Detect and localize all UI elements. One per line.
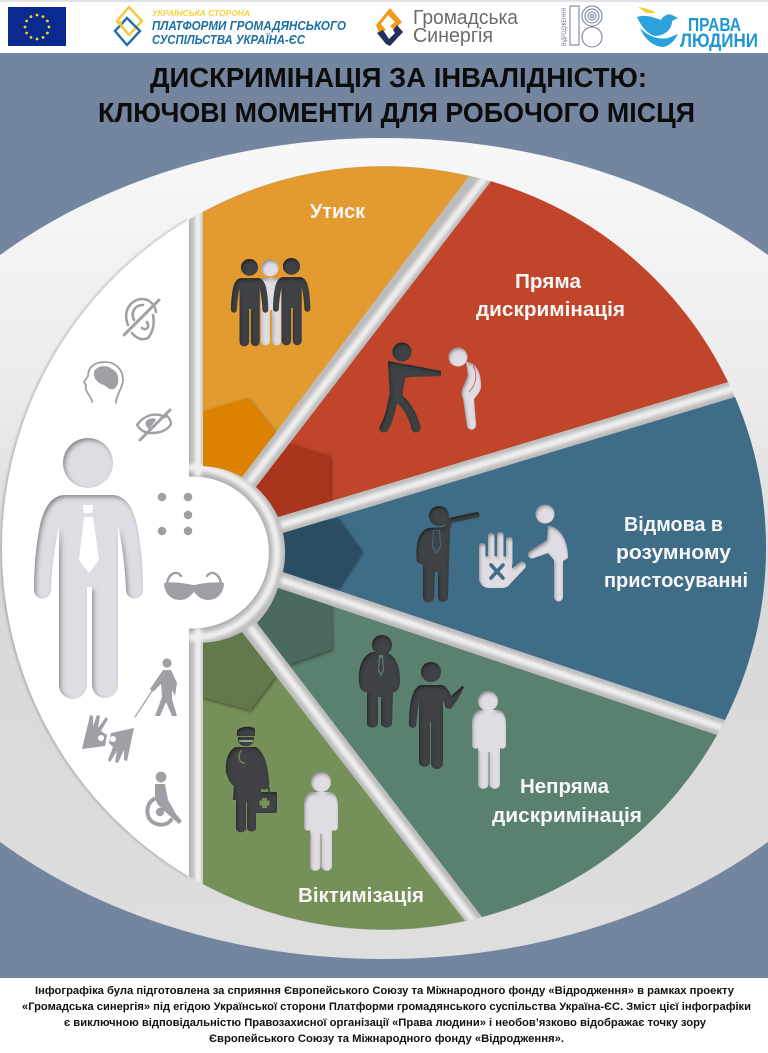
icon: crossed eye bbox=[137, 410, 171, 440]
footer disclaimer text: Інфографіка була підготовлена за сприяння Європейського Союзу та Міжнародного фонду «Відродження» в рамках проекту bbox=[35, 985, 735, 997]
figures: doctor and patient bbox=[226, 727, 338, 871]
figures: pointing man and bent person bbox=[384, 342, 481, 430]
logo: civil society platform: ПЛАТФОРМИ ГРОМАДЯНСЬКОГО bbox=[152, 18, 346, 33]
label: Відмова в розумному пристосуванні: пристосуванні bbox=[604, 570, 748, 592]
title: ДИСКРИМІНАЦІЯ ЗА ІНВАЛІДНІСТЮ: bbox=[150, 62, 647, 93]
light grey ellipse backdrop bbox=[0, 138, 768, 959]
label: Відмова в розумному пристосуванні: розумному bbox=[616, 542, 732, 564]
header logo strip bbox=[0, 0, 768, 53]
icon: head with brain bbox=[84, 362, 123, 403]
hexagon: teal dark bbox=[257, 588, 335, 666]
icon: dark glasses bbox=[164, 573, 224, 600]
figures: refusing man, stop hand, person bbox=[416, 504, 568, 602]
label: Пряма дискримінація: дискримінація bbox=[476, 299, 625, 321]
footer disclaimer text: Європейського Союзу та Міжнародного фонду «Відродження». bbox=[209, 1033, 564, 1045]
slice: orange bbox=[203, 166, 469, 477]
logo: Vidrodzhennia foundation: ВІДРОДЖЕННЯ bbox=[562, 8, 568, 46]
hexagon: green dark bbox=[203, 632, 277, 713]
label: Утиск: Утиск bbox=[310, 201, 366, 223]
logo: Hromadska Synerhiia bbox=[376, 7, 519, 47]
footer disclaimer text: «Громадська синергія» під егідою Української сторони Платформи громадянського суспільства Україна-ЄС. Зміст цієї інфографіки bbox=[22, 1001, 751, 1013]
icon: wheelchair user bbox=[147, 772, 182, 825]
logo: EU flag bbox=[8, 7, 66, 46]
slice: blue bbox=[270, 390, 768, 730]
figures: three people, indirect discrimination bbox=[359, 635, 506, 789]
footer disclaimer text bbox=[22, 985, 751, 1045]
icon: braille dots bbox=[158, 493, 192, 535]
footer disclaimer text: є виключною відповідальністю Правозахисної організації «Права людини» і необов’язково відображає точку зору bbox=[64, 1017, 707, 1029]
slice: teal bbox=[250, 580, 730, 925]
main white-panel person figure bbox=[34, 438, 143, 699]
label: Віктимізація: Віктимізація bbox=[298, 885, 424, 907]
hexagon: orange dark bbox=[203, 398, 276, 477]
icon: crossed ear bbox=[124, 299, 159, 339]
logo: Hromadska Synerhiia: Громадська bbox=[413, 7, 519, 29]
white left half with hub bbox=[2, 220, 269, 876]
logo: Human Rights organisation: ПРАВА bbox=[688, 15, 741, 35]
figures: three people, harassment bbox=[231, 258, 310, 346]
logo: Vidrodzhennia foundation bbox=[562, 6, 602, 47]
title bbox=[98, 62, 695, 128]
slice: green bbox=[195, 625, 475, 930]
label: Непряма дискримінація: Непряма bbox=[520, 776, 610, 798]
logo: civil society platform: УКРАЇНСЬКА СТОРОНА bbox=[152, 9, 250, 18]
logo: Human Rights organisation: ЛЮДИНИ bbox=[680, 31, 758, 52]
icon: blind person with cane bbox=[135, 658, 177, 717]
hexagon: blue dark bbox=[275, 518, 362, 588]
slice: red bbox=[256, 181, 728, 517]
title: КЛЮЧОВІ МОМЕНТИ ДЛЯ РОБОЧОГО МІСЦЯ bbox=[98, 97, 695, 128]
label: Непряма дискримінація bbox=[492, 776, 642, 827]
label: Непряма дискримінація: дискримінація bbox=[492, 805, 642, 827]
icon: sign language hands bbox=[82, 715, 134, 763]
logo: Human Rights organisation bbox=[637, 7, 758, 52]
logo: Hromadska Synerhiia: Синергія bbox=[413, 25, 493, 47]
label: Відмова в розумному пристосуванні: Відмова в bbox=[624, 514, 723, 536]
logo: civil society platform bbox=[115, 7, 346, 47]
label: Пряма дискримінація bbox=[476, 271, 625, 321]
logo: civil society platform: СУСПІЛЬСТВА УКРАЇНА-ЄС bbox=[152, 32, 306, 47]
discrimination wheel bbox=[2, 160, 768, 930]
label: Відмова в розумному пристосуванні bbox=[604, 514, 748, 592]
hexagon: red dark bbox=[256, 443, 334, 517]
footer panel bbox=[0, 978, 768, 1053]
label: Пряма дискримінація: Пряма bbox=[515, 271, 582, 293]
